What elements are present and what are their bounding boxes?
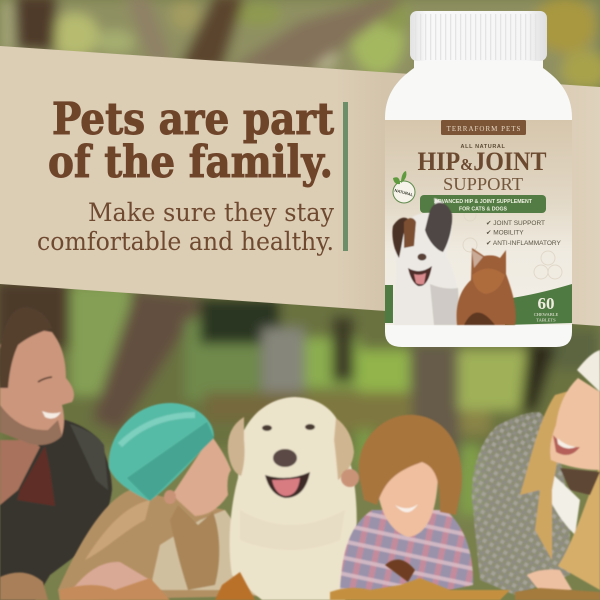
- heading: Pets are part: [52, 94, 335, 145]
- hair: [520, 385, 590, 560]
- product bottle: [385, 11, 572, 347]
- tablet count: TABLETS: [536, 318, 556, 322]
- face: [0, 330, 74, 445]
- natural seal: NATURAL: [394, 188, 414, 198]
- tablet count: 60: [538, 294, 554, 313]
- dog on label: [392, 198, 460, 325]
- bottle cap: [410, 11, 547, 61]
- subheading: comfortable and healthy.: [37, 227, 334, 257]
- hand on dog: [341, 469, 359, 487]
- product name: HIP&JOINT: [418, 147, 546, 176]
- man: [0, 307, 112, 600]
- collar: [17, 446, 55, 506]
- heading: of the family.: [48, 137, 333, 188]
- skin: hand and pink sleeve: [72, 562, 150, 596]
- hair: [359, 415, 462, 515]
- green footer band: [385, 284, 572, 325]
- girl: [58, 403, 262, 600]
- benefits list: ✔ JOINT SUPPORT: [486, 220, 545, 227]
- smile: [553, 435, 580, 455]
- cat on label: [457, 248, 516, 325]
- product name: [418, 147, 546, 194]
- tablet count: [534, 294, 558, 322]
- product name: SUPPORT: [443, 174, 523, 194]
- jacket: [0, 419, 112, 600]
- natural seal: [393, 171, 415, 203]
- benefits list: [486, 220, 561, 247]
- subheading: Make sure they stay: [88, 198, 335, 228]
- bottle body: [385, 58, 572, 347]
- face: [172, 438, 231, 516]
- shirt: [340, 510, 473, 595]
- honeycomb pattern: [463, 209, 562, 279]
- hair and sweater base: [58, 490, 262, 600]
- hair highlight: [85, 500, 150, 560]
- brand badge: [441, 120, 526, 135]
- boy: [340, 415, 473, 595]
- face: [550, 378, 600, 470]
- beard shading: [0, 405, 62, 445]
- teal beanie: [109, 403, 214, 501]
- green supplement ribbon: [420, 195, 546, 213]
- subheading: [37, 198, 335, 257]
- brand badge: TERRAFORM PETS: [447, 125, 521, 133]
- scarf: [546, 470, 580, 535]
- heading: [48, 94, 335, 188]
- sweater: [150, 510, 262, 596]
- sweater: [472, 412, 570, 595]
- benefits list: ✔ ANTI-INFLAMMATORY: [486, 240, 561, 247]
- hair: [0, 307, 52, 388]
- neck shadow: [560, 468, 600, 495]
- autumn leaves: [0, 560, 600, 600]
- golden retriever: [228, 397, 357, 600]
- vertical green divider: [343, 102, 348, 251]
- label background: [385, 120, 572, 325]
- banner: [0, 46, 600, 326]
- product tag line: ALL NATURAL: [461, 144, 505, 150]
- benefits list: ✔ MOBILITY: [486, 230, 524, 236]
- hands: [527, 570, 572, 598]
- face: [376, 450, 438, 537]
- green supplement ribbon: FOR CATS & DOGS: [459, 206, 508, 212]
- woman: [472, 350, 600, 598]
- tablet count: CHEWABLE: [534, 312, 558, 317]
- hat: [577, 350, 600, 392]
- family photo foreground: [0, 307, 600, 600]
- neck: [0, 440, 40, 505]
- green supplement ribbon: ADVANCED HIP & JOINT SUPPLEMENT: [434, 199, 533, 205]
